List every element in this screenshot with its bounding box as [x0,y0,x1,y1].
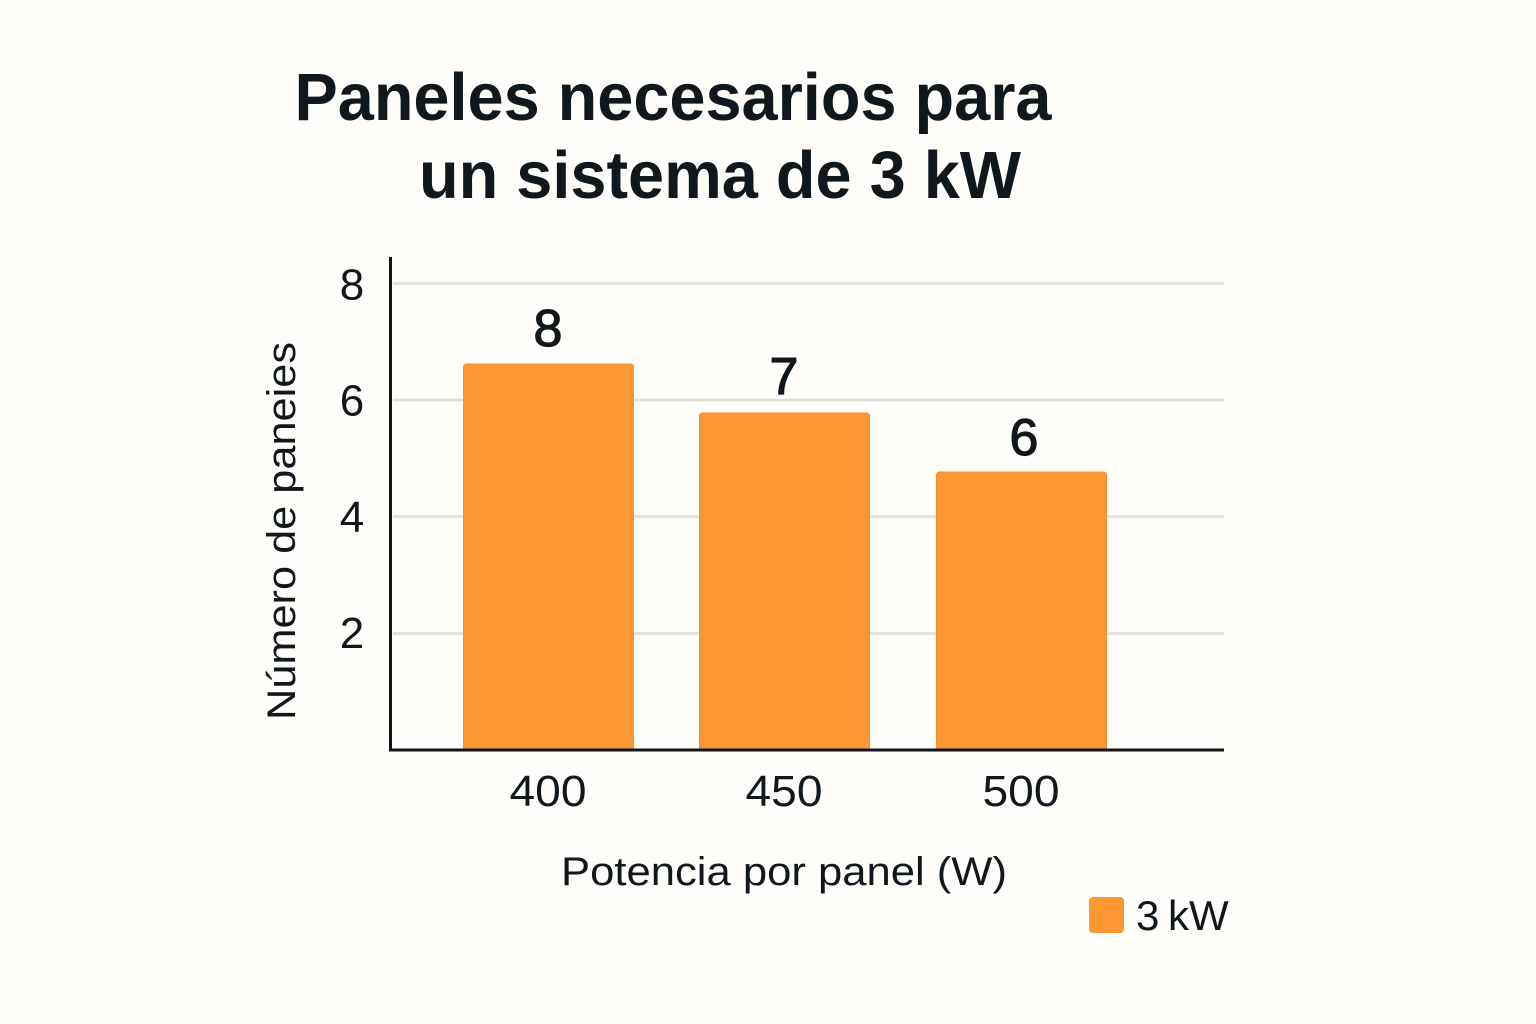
x axis labels: 500 [982,767,1060,816]
x axis labels [510,767,1060,816]
x axis labels: 450 [746,767,822,816]
bar value labels: 7 [770,348,798,406]
y axis labels: 2 [340,609,364,658]
title: Paneles necesarios para [294,60,1052,135]
x axis title: Potencia por panel (W) [561,850,1007,894]
y axis labels: 4 [340,493,364,542]
y axis title: Número de paneies [260,342,304,720]
legend [1089,892,1229,939]
y axis labels: 6 [340,376,364,426]
bar chart [260,257,1224,894]
legend: 3 kW [1136,892,1229,939]
bar value labels [534,300,1038,467]
x axis labels: 400 [510,767,586,816]
bar: 400 W [464,364,634,750]
bar value labels: 6 [1010,409,1038,467]
bar value labels: 8 [534,300,562,358]
y axis labels: 8 [340,260,364,310]
title: un sistema de 3 kW [419,138,1022,213]
bar: 450 W [700,413,870,750]
bar: 500 W [936,472,1106,750]
title [294,60,1052,213]
y axis labels [340,260,364,658]
axes [390,257,1224,750]
